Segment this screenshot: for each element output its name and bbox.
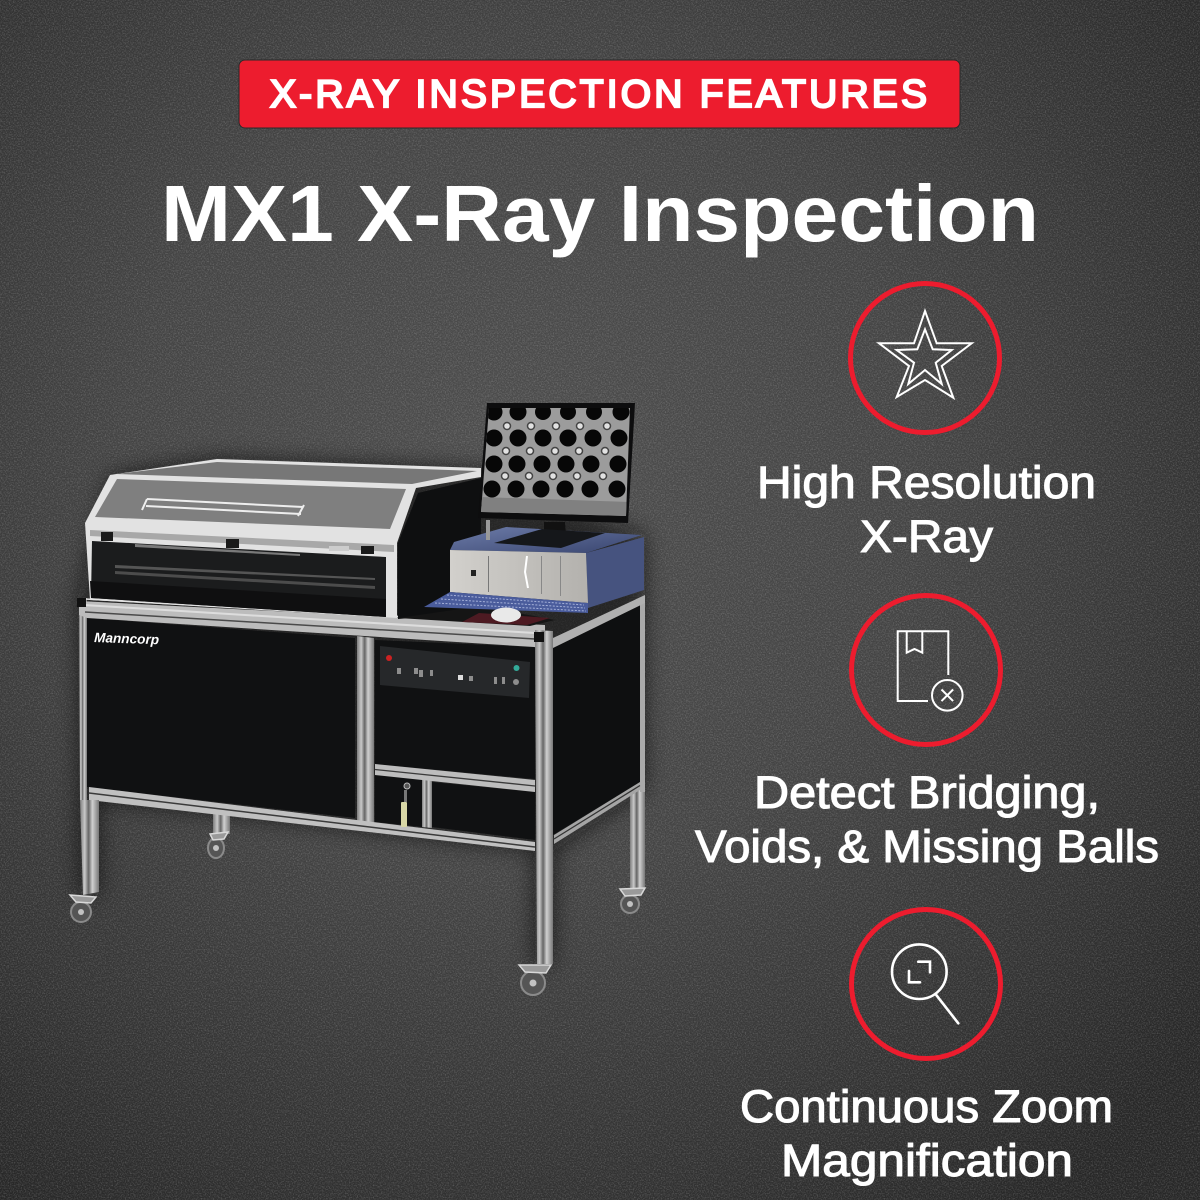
machine cabinet panels (87, 603, 640, 840)
label: high resolution x-ray (757, 457, 1096, 562)
product illustration: MX1 X-ray machine (70, 403, 645, 995)
label: continuous zoom magnification (740, 1081, 1113, 1186)
header badge: X-Ray Inspection Features (239, 60, 960, 128)
label: detect bridging, voids and missing balls: Voids, & Missing Balls (695, 821, 1159, 872)
icon: book with x mark (852, 596, 1000, 744)
viewing window (91, 541, 386, 617)
feature: continuous zoom magnification (740, 910, 1113, 1186)
label: continuous zoom magnification: Continuous Zoom (740, 1081, 1113, 1132)
casters (70, 832, 645, 995)
monitor (478, 403, 635, 548)
label: detect bridging, voids and missing balls (695, 767, 1159, 872)
aluminium table frame (77, 595, 645, 964)
header badge: X-Ray Inspection Features: X-RAY INSPECTION FEATURES (270, 73, 927, 116)
printer side panel (398, 478, 481, 619)
brand logo: Manncorp (94, 630, 159, 647)
rear legs (213, 790, 645, 888)
label: detect bridging, voids and missing balls: Detect Bridging, (754, 767, 1100, 818)
feature: detect bridging, voids and missing balls (695, 596, 1159, 872)
x-ray image of solder balls (481, 404, 630, 516)
feature: high resolution x-ray (757, 284, 1096, 562)
lock key with tag (401, 783, 410, 827)
desktop surface (398, 606, 555, 626)
label: high resolution x-ray: High Resolution (757, 457, 1096, 508)
title: MX1 X-Ray Inspection (161, 169, 1039, 258)
computer tower (450, 527, 644, 608)
keyboard (424, 592, 588, 613)
control panel (380, 646, 530, 698)
mouse (491, 608, 521, 622)
X-ray enclosure (85, 459, 481, 618)
enclosure handle (142, 499, 304, 516)
icon: magnifier (852, 910, 1000, 1058)
label: continuous zoom magnification: Magnification (781, 1135, 1073, 1186)
icon: star (850, 284, 1000, 432)
label: high resolution x-ray: X-Ray (860, 511, 994, 562)
mouse pad (462, 613, 550, 625)
